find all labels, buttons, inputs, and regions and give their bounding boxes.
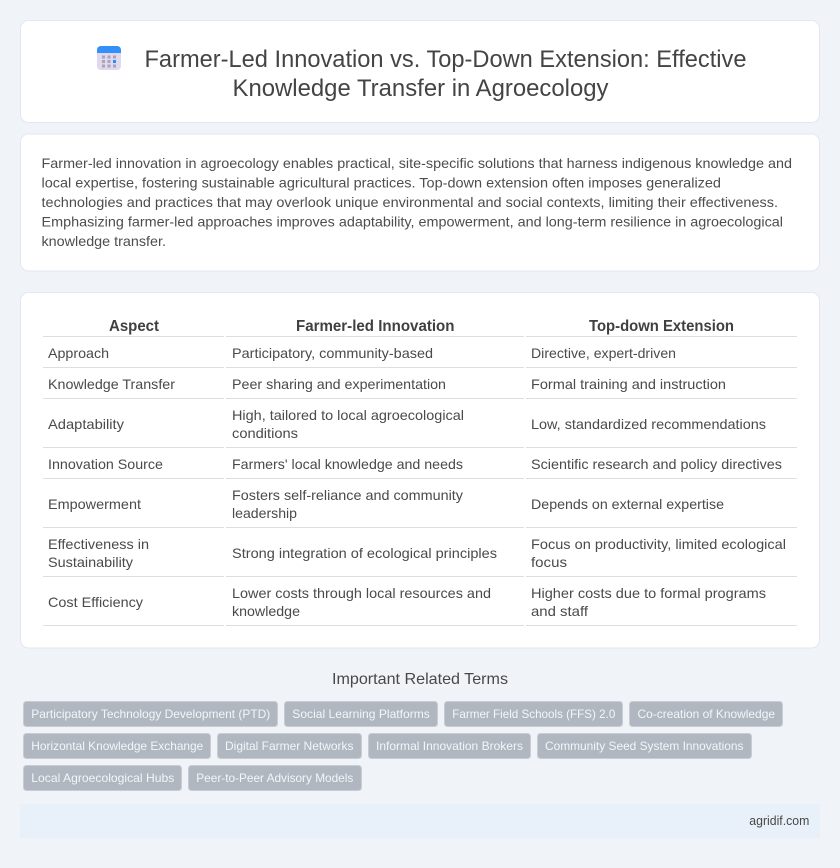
text block: introduction paragraph: Farmer-led innovation in agroecology enables practical, site-specific solutions that harness indigenous knowledge and bbox=[42, 155, 792, 171]
tag bbox=[24, 702, 278, 726]
table header row: Top-down Extension bbox=[589, 318, 734, 335]
panel: introduction bbox=[20, 134, 820, 271]
row: cost efficiency: Higher costs due to formal programs bbox=[531, 585, 766, 601]
tag bbox=[368, 734, 530, 758]
row: effectiveness in sustainability: Sustainability bbox=[48, 554, 133, 570]
tag bbox=[218, 734, 362, 758]
row: empowerment bbox=[48, 487, 724, 521]
table header row: Aspect bbox=[109, 318, 159, 335]
title bbox=[144, 46, 746, 102]
text block: introduction paragraph: Emphasizing farmer-led approaches improves adaptability, empowerment, and long-term resilience in agroecological bbox=[42, 214, 783, 230]
tag: Informal Innovation Brokers bbox=[376, 739, 523, 753]
tag: Peer-to-Peer Advisory Models bbox=[196, 771, 353, 785]
row: effectiveness in sustainability: Effectiveness in bbox=[48, 536, 149, 552]
row: approach bbox=[48, 345, 676, 361]
title: Farmer-Led Innovation vs. Top-Down Extension: Effective bbox=[144, 46, 746, 73]
tag: Horizontal Knowledge Exchange bbox=[31, 739, 204, 753]
row: empowerment: Empowerment bbox=[48, 496, 141, 512]
heading: important related terms: Important Related Terms bbox=[332, 671, 508, 688]
row: adaptability: Adaptability bbox=[48, 416, 124, 432]
text block: introduction paragraph: technologies and practices that may overlook unique environmental and social contexts, limiting their effectiveness. bbox=[42, 194, 778, 210]
text block: introduction paragraph: knowledge transfer. bbox=[42, 233, 166, 249]
row: approach: Directive, expert-driven bbox=[531, 345, 676, 361]
tag bbox=[284, 702, 438, 726]
title: Knowledge Transfer in Agroecology bbox=[232, 75, 608, 102]
table header row: Farmer-led Innovation bbox=[296, 318, 454, 335]
row: cost efficiency bbox=[48, 585, 766, 619]
tag: Participatory Technology Development (PTD) bbox=[31, 707, 270, 721]
tag: Community Seed System Innovations bbox=[545, 739, 744, 753]
row: adaptability: Low, standardized recommendations bbox=[531, 416, 766, 432]
icon: calendar bbox=[97, 46, 121, 70]
row: cost efficiency: knowledge bbox=[232, 603, 300, 619]
row: effectiveness in sustainability: focus bbox=[531, 554, 567, 570]
row: effectiveness in sustainability bbox=[48, 536, 786, 570]
tag: Social Learning Platforms bbox=[292, 707, 430, 721]
tag: Local Agroecological Hubs bbox=[31, 771, 174, 785]
footer source text: agridif.com bbox=[749, 814, 809, 828]
footer bar bbox=[20, 804, 820, 838]
tags: related terms bbox=[24, 702, 782, 790]
tag bbox=[24, 766, 182, 790]
row: effectiveness in sustainability: Focus on productivity, limited ecological bbox=[531, 536, 786, 552]
tag bbox=[538, 734, 752, 758]
row: approach: Approach bbox=[48, 345, 109, 361]
row: cost efficiency: Lower costs through local resources and bbox=[232, 585, 491, 601]
row: cost efficiency: and staff bbox=[531, 603, 588, 619]
row: knowledge transfer: Knowledge Transfer bbox=[48, 376, 175, 392]
tag bbox=[444, 702, 622, 726]
row: knowledge transfer: Formal training and instruction bbox=[531, 376, 726, 392]
table header row bbox=[109, 318, 734, 335]
row: innovation source bbox=[48, 456, 782, 472]
tag bbox=[630, 702, 782, 726]
row: empowerment: Depends on external expertise bbox=[531, 496, 724, 512]
tag bbox=[188, 766, 362, 790]
text block: introduction paragraph bbox=[42, 155, 792, 249]
row: innovation source: Innovation Source bbox=[48, 456, 163, 472]
row: innovation source: Farmers' local knowledge and needs bbox=[232, 456, 463, 472]
tag: Digital Farmer Networks bbox=[225, 739, 354, 753]
row: cost efficiency: Cost Efficiency bbox=[48, 594, 143, 610]
panel: comparison table bbox=[20, 292, 820, 648]
row: effectiveness in sustainability: Strong integration of ecological principles bbox=[232, 545, 497, 561]
row: knowledge transfer bbox=[48, 376, 726, 392]
tag: Co-creation of Knowledge bbox=[638, 707, 775, 721]
row: knowledge transfer: Peer sharing and experimentation bbox=[232, 376, 446, 392]
row: adaptability: conditions bbox=[232, 425, 298, 441]
row: approach: Participatory, community-based bbox=[232, 345, 433, 361]
row: empowerment: leadership bbox=[232, 505, 297, 521]
row: empowerment: Fosters self-reliance and community bbox=[232, 487, 463, 503]
row: adaptability: High, tailored to local agroecological bbox=[232, 407, 464, 423]
row: adaptability bbox=[48, 407, 766, 441]
row: innovation source: Scientific research and policy directives bbox=[531, 456, 782, 472]
text block: introduction paragraph: local expertise, fostering sustainable agricultural practices. Top-down extension often imposes generalized bbox=[42, 174, 721, 190]
tag bbox=[24, 734, 210, 758]
panel: title header bbox=[20, 20, 820, 122]
tag: Farmer Field Schools (FFS) 2.0 bbox=[452, 707, 616, 721]
